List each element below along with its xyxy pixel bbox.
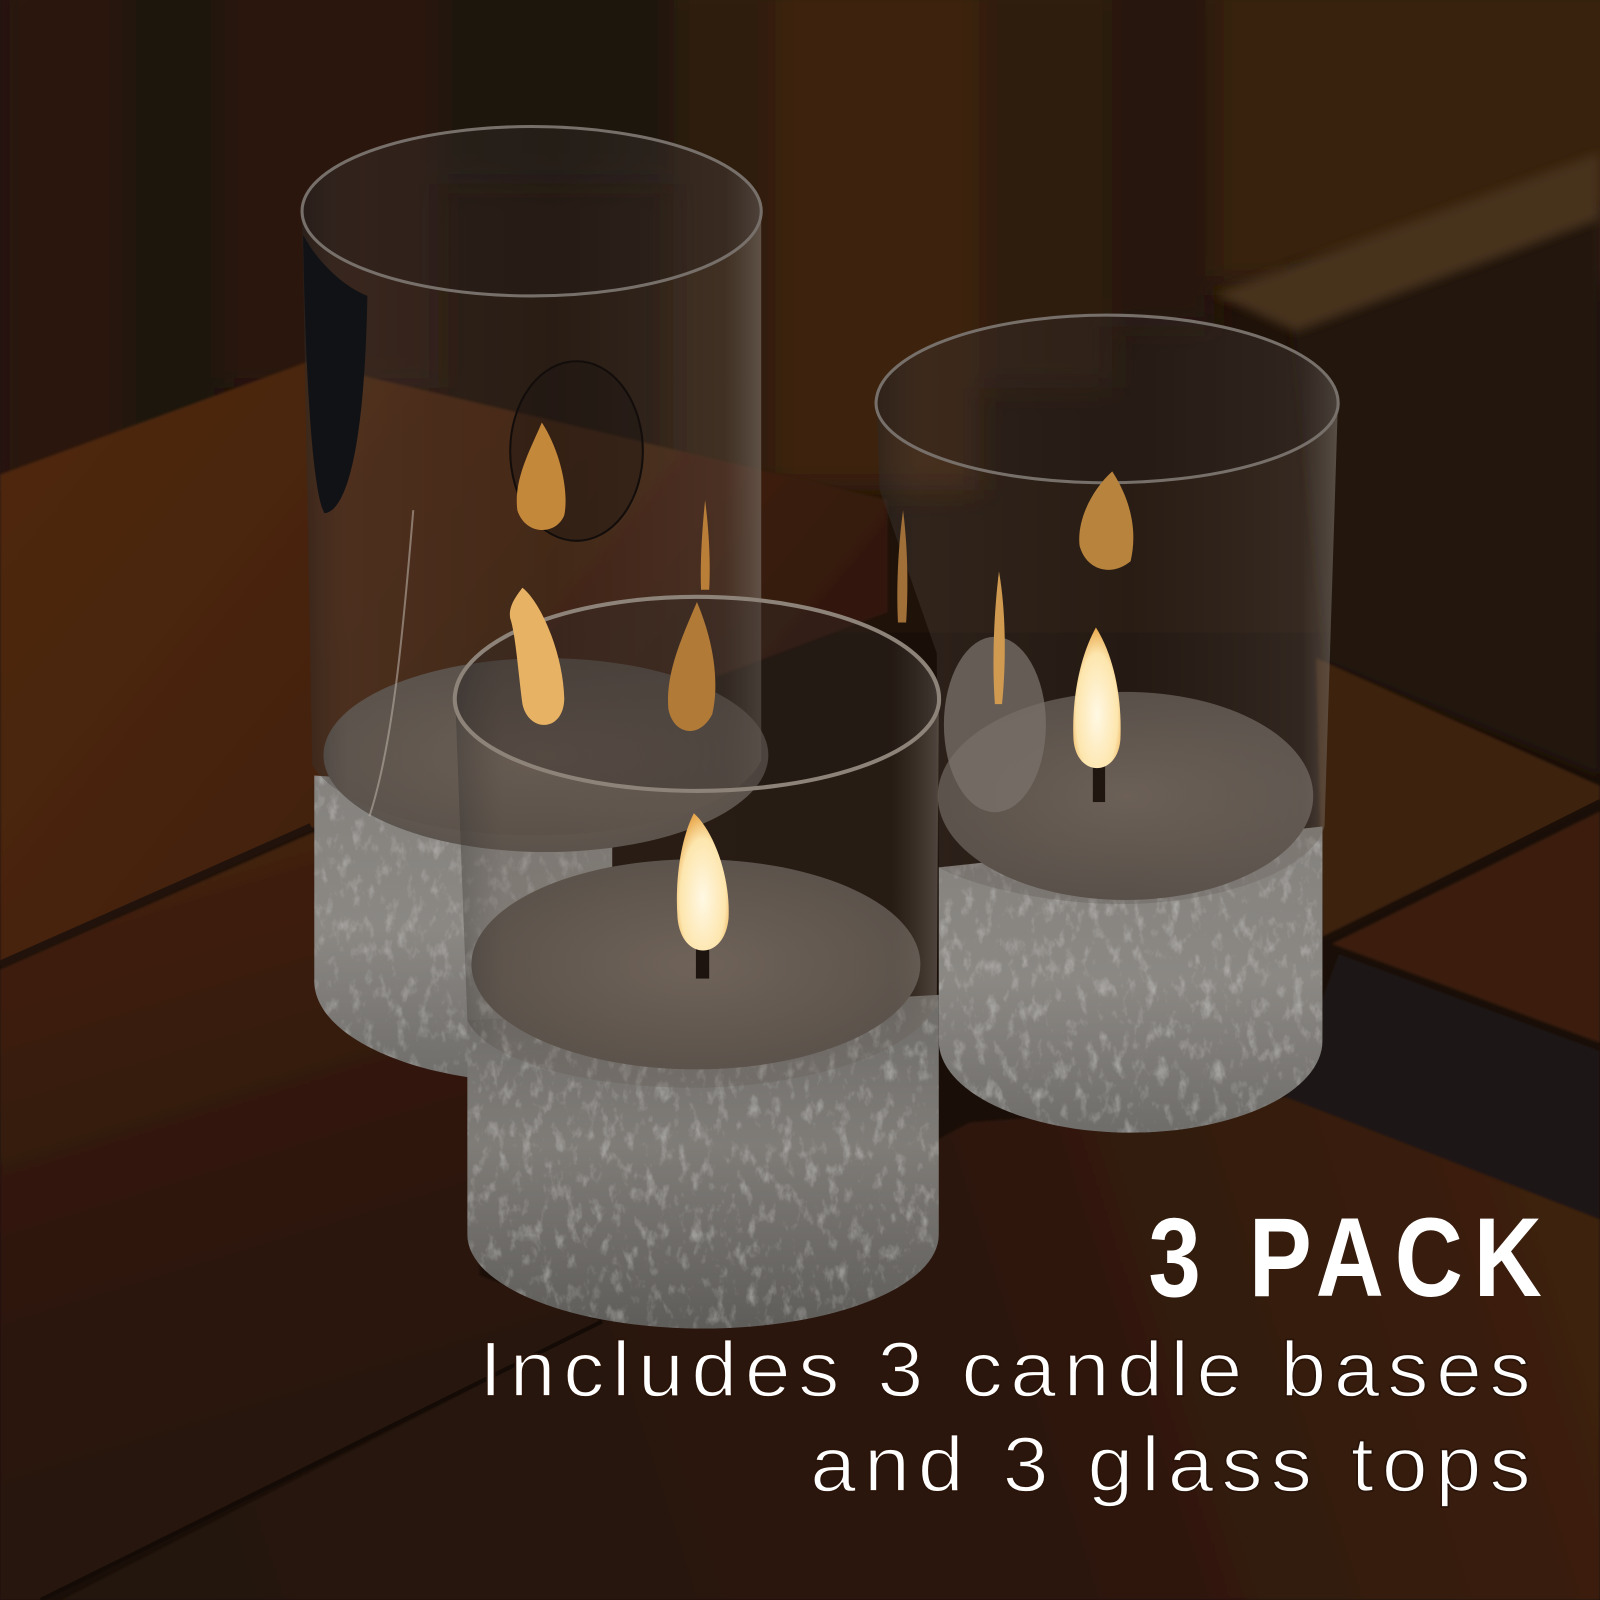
reflections [944,637,1046,812]
candle: medium back-right [876,313,1338,1133]
wick [1093,765,1105,802]
reflected flame [510,361,643,541]
top surface [938,692,1313,900]
base [467,995,939,1329]
text: description [479,1326,1531,1507]
dark iron strap [1286,954,1600,1219]
top surface [471,859,920,1069]
flame [1073,628,1121,768]
candle: tall back-left [302,127,768,1082]
top surface [323,658,768,852]
glass [877,313,1338,904]
text: description: and 3 glass tops [810,1421,1531,1507]
glass [302,127,761,836]
flame [677,813,729,951]
heading: 3 PACK: 3 PACK [1148,1194,1542,1320]
base [939,827,1322,1133]
background: wooden wall [0,0,1600,776]
reflected flame [668,602,715,731]
glass [455,597,939,1088]
wick [696,944,709,979]
text: description: Includes 3 candle bases [479,1326,1531,1412]
base [314,776,612,1082]
candle: short front [455,588,939,1332]
background: wooden table [0,362,1600,1600]
